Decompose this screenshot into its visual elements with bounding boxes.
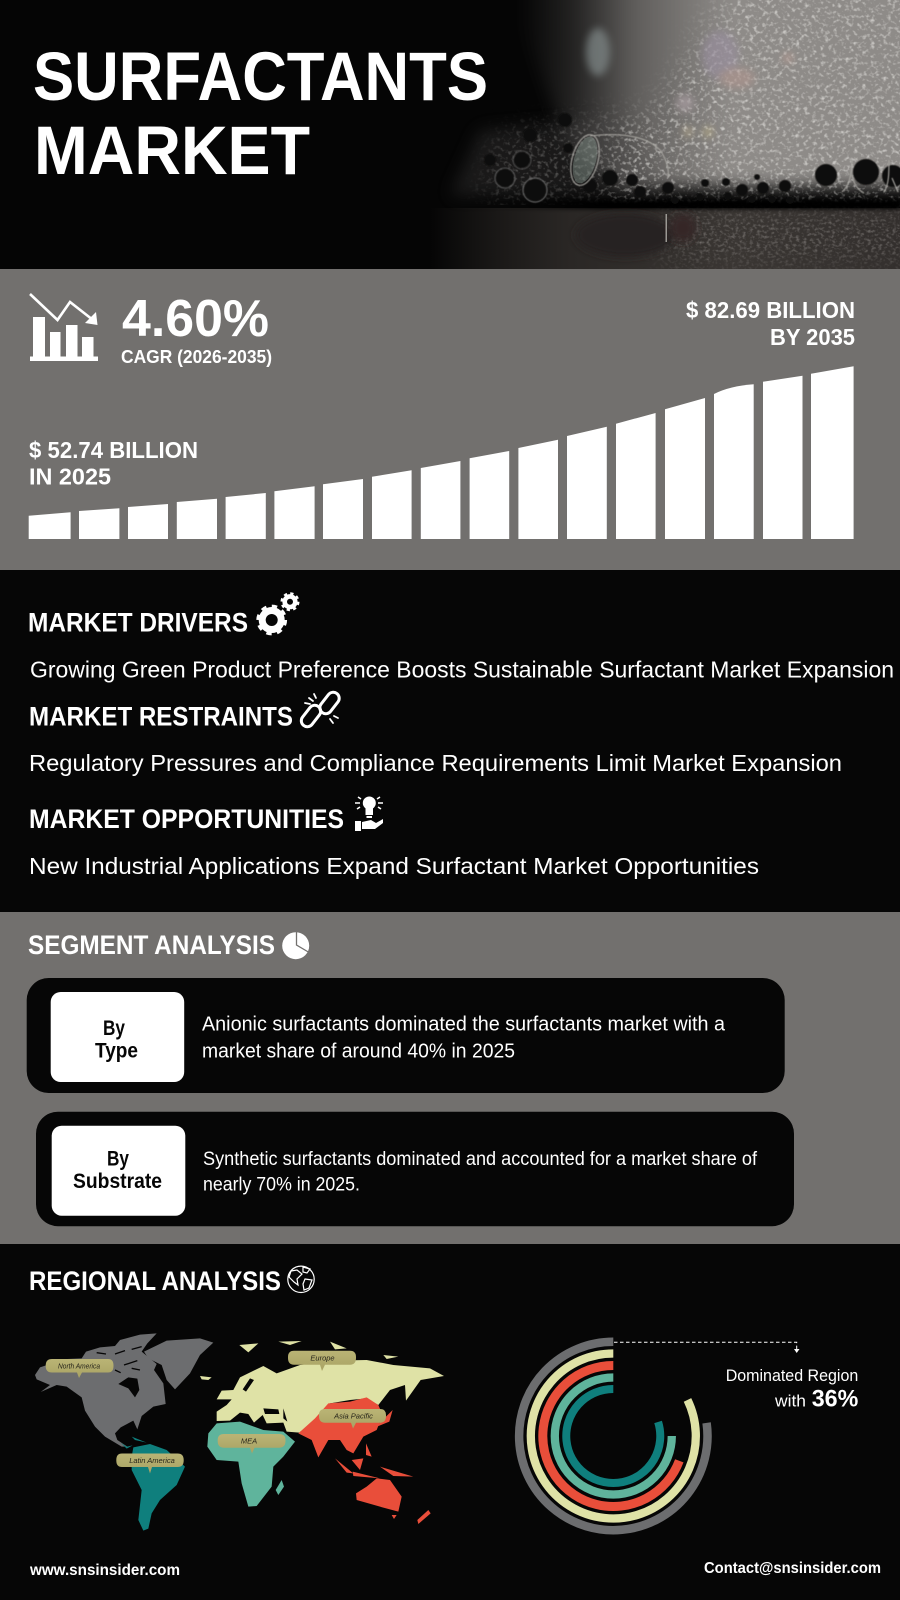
heading: regional analysis: REGIONAL ANALYSIS <box>29 1266 281 1296</box>
callout: dominated region: with <box>774 1392 806 1411</box>
CAGR value: 4.60% <box>122 290 269 348</box>
callout: Latin America: Latin America <box>129 1456 175 1465</box>
icon: globe <box>288 1266 314 1293</box>
label box: by type: By <box>103 1017 125 1040</box>
2025 value: IN 2025 <box>29 464 111 490</box>
card: by substrate <box>36 1112 794 1226</box>
callout: North America <box>46 1359 114 1378</box>
heading: market opportunities: MARKET OPPORTUNITIES <box>29 804 344 834</box>
text: by type <box>202 1014 726 1063</box>
region: MEA <box>207 1422 295 1507</box>
label box: by substrate: By <box>107 1148 129 1171</box>
region: North America <box>35 1333 213 1447</box>
hero panel: foam photo <box>456 0 900 269</box>
world map <box>35 1333 444 1531</box>
icon: chart with declining arrow <box>30 294 98 361</box>
callout: dominated region: 36% <box>812 1386 858 1413</box>
title: MARKET <box>34 112 310 189</box>
region: Europe <box>200 1341 444 1433</box>
label box: by substrate: Substrate <box>73 1170 162 1193</box>
2035 value <box>686 297 855 350</box>
dark bubbles along the water line <box>484 113 900 204</box>
panel: drivers, restraints, opportunities <box>0 570 900 912</box>
callout: Europe <box>288 1351 356 1371</box>
callout: dominated region <box>726 1366 858 1413</box>
2035 value: $ 82.69 BILLION <box>686 297 855 323</box>
text: by type: market share of around 40% in 2025 <box>202 1041 515 1063</box>
icon: hand with light bulb <box>355 796 383 831</box>
text: restraint: Regulatory Pressures and Compliance Requirements Limit Market Expansion <box>29 750 842 776</box>
icon: gears <box>258 594 298 634</box>
water reflection details <box>588 214 676 256</box>
footer: contact: Contact@snsinsider.com <box>704 1560 881 1577</box>
callout: North America: North America <box>58 1362 100 1370</box>
label box: by type: Type <box>95 1040 138 1063</box>
region: Asia Pacific <box>298 1397 431 1524</box>
heading: segment analysis: SEGMENT ANALYSIS <box>28 930 275 960</box>
water line <box>500 200 900 209</box>
label box: by type <box>51 992 184 1082</box>
callout: MEA: MEA <box>241 1436 257 1446</box>
2025 value <box>29 437 198 490</box>
radial chart: regional share <box>519 1342 708 1530</box>
icon: broken chain link <box>299 690 342 729</box>
callout: MEA <box>218 1434 286 1454</box>
text: opportunity: New Industrial Applications Expand Surfactant Market Opportunities <box>29 853 759 879</box>
heading: market drivers: MARKET DRIVERS <box>28 608 248 638</box>
panel: market size <box>0 269 900 570</box>
callout: Latin America <box>116 1454 184 1474</box>
text: driver: Growing Green Product Preference Boosts Sustainable Surfactant Market Expansion <box>30 656 894 682</box>
callout: dominated region: Dominated Region <box>726 1366 858 1385</box>
title: SURFACTANTS <box>33 38 488 115</box>
card: by type <box>27 978 785 1093</box>
label box: by substrate <box>52 1126 185 1216</box>
text: by type: Anionic surfactants dominated the surfactants market with a <box>202 1014 726 1036</box>
region: Latin America <box>121 1437 185 1531</box>
heading: market restraints: MARKET RESTRAINTS <box>29 702 293 732</box>
icon: pie chart <box>282 931 310 959</box>
bubble rims <box>495 132 898 202</box>
CAGR label: CAGR (2026-2035) <box>121 347 272 367</box>
iridescent film highlights <box>586 28 793 137</box>
bar chart: growth 2025 to 2035 <box>29 366 854 539</box>
callout: Asia Pacific <box>319 1409 386 1428</box>
panel: segment analysis <box>0 912 900 1244</box>
text: by substrate: nearly 70% in 2025. <box>203 1175 360 1196</box>
text: by substrate <box>203 1149 758 1196</box>
callout: Europe: Europe <box>310 1354 335 1362</box>
title <box>33 38 488 189</box>
callout: Asia Pacific: Asia Pacific <box>333 1412 373 1420</box>
arrow: dominated region leader <box>614 1342 800 1353</box>
2035 value: BY 2035 <box>770 324 855 350</box>
text: by substrate: Synthetic surfactants dominated and accounted for a market share of <box>203 1149 758 1170</box>
footer: website: www.snsinsider.com <box>29 1562 180 1579</box>
2025 value: $ 52.74 BILLION <box>29 437 198 463</box>
